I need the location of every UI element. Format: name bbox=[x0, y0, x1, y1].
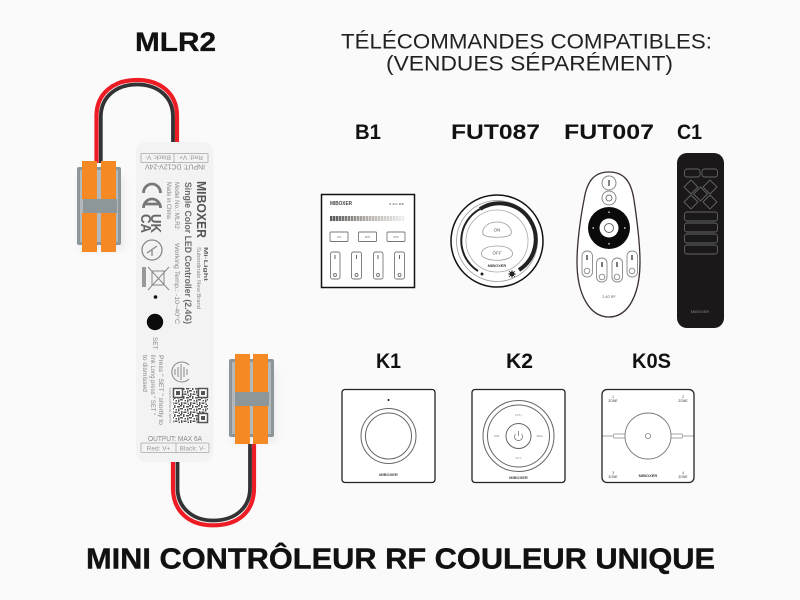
remote: FUT007 oval bbox=[577, 172, 640, 317]
heading: compatible remotes: (VENDUES SÉPARÉMENT) bbox=[386, 52, 673, 76]
K0S zone labels: ZONE bbox=[678, 399, 688, 403]
controller body: Made in China bbox=[165, 182, 172, 219]
K0S zone labels: 3 bbox=[612, 471, 614, 475]
K0S logo: MIBOXER bbox=[639, 473, 657, 478]
FUT087 logo: MIBOXER bbox=[488, 263, 506, 268]
B1 RF tag: 2.4G RF bbox=[389, 202, 404, 206]
K2 scene labels: CCT+ bbox=[515, 413, 523, 417]
connector: bottom bbox=[229, 354, 276, 444]
FUT007 wheel bbox=[588, 207, 630, 249]
label: C1: C1 bbox=[677, 121, 702, 144]
K2 scene labels: DIM- bbox=[494, 434, 500, 438]
instructions text bbox=[141, 355, 163, 426]
output terminal label: Red: V+ bbox=[147, 446, 171, 452]
B1 button captions: OFF bbox=[393, 235, 399, 239]
Mi-Light brand text: Mi·Light bbox=[202, 247, 208, 281]
FUT087 off button bbox=[481, 246, 513, 260]
FUT007 power buttons bbox=[602, 176, 616, 190]
QR code bbox=[173, 388, 208, 423]
certification circle icon bbox=[142, 240, 162, 260]
remote: FUT087 round dial bbox=[451, 195, 543, 287]
UKCA mark bbox=[137, 214, 163, 233]
B1 button captions: MID bbox=[365, 235, 371, 239]
K0S zone labels bbox=[608, 395, 688, 479]
remote: K0S panel bbox=[602, 390, 694, 482]
C1 logo: MIBOXER bbox=[691, 309, 709, 314]
input terminal label: Red: V+ bbox=[179, 154, 203, 160]
bottom title: MINI CONTRÔLEUR RF COULEUR UNIQUE bbox=[86, 542, 715, 576]
FUT087 on button bbox=[483, 222, 511, 237]
input terminal label: Black: V- bbox=[145, 154, 171, 160]
label: FUT007: FUT007 bbox=[564, 121, 654, 144]
K0S zone labels: ZONE bbox=[608, 399, 618, 403]
C1 buttons bbox=[684, 169, 718, 254]
remote: FUT087 round dial: ON bbox=[494, 228, 500, 232]
LED hole bbox=[154, 295, 157, 299]
K0S zone labels: ZONE bbox=[678, 475, 688, 479]
brand logo: MIBOXER bbox=[194, 181, 209, 239]
K0S zone labels: 4 bbox=[682, 471, 684, 475]
label: K2: K2 bbox=[506, 350, 533, 373]
K2 power icon bbox=[514, 431, 522, 441]
remote: C1 black bbox=[677, 153, 724, 328]
B1 brightness gradient bbox=[330, 216, 405, 221]
output terminal label bbox=[141, 443, 209, 452]
FUT007 tag text: 2.4G RF bbox=[602, 295, 616, 299]
B1 button captions bbox=[337, 235, 399, 239]
label: B1: B1 bbox=[355, 121, 381, 144]
input terminal label bbox=[141, 154, 208, 162]
heading: compatible remotes bbox=[341, 30, 712, 76]
remote: K1 panel bbox=[342, 390, 435, 482]
instructions text: link Long press " SET " bbox=[149, 355, 155, 415]
K1 logo: MIBOXER bbox=[379, 472, 398, 477]
K2 scene labels bbox=[494, 413, 544, 460]
B1 button captions: ON bbox=[337, 235, 341, 239]
K0S zone labels: 2 bbox=[682, 395, 684, 399]
K2 scene labels: CCT- bbox=[515, 456, 522, 460]
remote: B1 wall panel bbox=[322, 194, 414, 288]
label: K0S: K0S bbox=[632, 350, 671, 373]
UKCA mark: CA bbox=[137, 214, 153, 233]
B1 buttons bbox=[330, 232, 405, 279]
label: K1: K1 bbox=[376, 350, 401, 373]
SET label: SET bbox=[151, 337, 158, 350]
connector: top bbox=[77, 161, 124, 252]
controller body bbox=[136, 142, 214, 462]
FUT007 zone buttons bbox=[582, 251, 638, 282]
B1 logo: MIBOXER bbox=[330, 201, 352, 207]
heading: compatible remotes: TÉLÉCOMMANDES COMPATIBLES: bbox=[341, 30, 712, 54]
instructions text: Press " SET " shortly to bbox=[157, 355, 163, 426]
instruction QR caption: Instructions here bbox=[168, 388, 173, 424]
CE mark bbox=[144, 184, 160, 208]
instructions text: to dismissed bbox=[141, 355, 147, 392]
WEEE icon bbox=[142, 267, 169, 290]
FUT087 dark arc bbox=[461, 209, 480, 271]
subordinate brand text: Subordinate New Brand bbox=[195, 247, 201, 309]
K0S centre icon bbox=[646, 434, 650, 438]
UKCA mark: UK bbox=[147, 214, 163, 233]
K0S zone labels: 1 bbox=[612, 395, 614, 399]
label: FUT087: FUT087 bbox=[451, 121, 540, 144]
remote: FUT087 round dial: OFF bbox=[492, 250, 502, 256]
remote: K2 panel bbox=[472, 390, 565, 482]
output terminal label: Black: V- bbox=[180, 446, 205, 452]
model text: Model No.: MLR2 bbox=[173, 182, 180, 229]
product name: Single Color LED Controller (2.4G) bbox=[182, 182, 193, 324]
bottom wire bbox=[173, 444, 254, 525]
SET button bbox=[147, 314, 163, 330]
top wire bbox=[96, 80, 177, 163]
title: MLR2: MLR2 bbox=[135, 27, 216, 57]
K2 scene labels: DIM+ bbox=[537, 434, 544, 438]
input voltage text: INPUT: DC12V-24V bbox=[145, 162, 205, 170]
K0S zone labels: ZONE bbox=[608, 475, 618, 479]
K2 logo: MIBOXER bbox=[509, 475, 528, 480]
working temperature: Working Temp.: -10~40°C bbox=[173, 243, 181, 324]
FUT087 brightness icons bbox=[480, 272, 484, 276]
app icon bbox=[172, 362, 189, 382]
output text: OUTPUT: MAX 6A bbox=[148, 436, 202, 443]
K0S side sliders bbox=[602, 434, 694, 438]
